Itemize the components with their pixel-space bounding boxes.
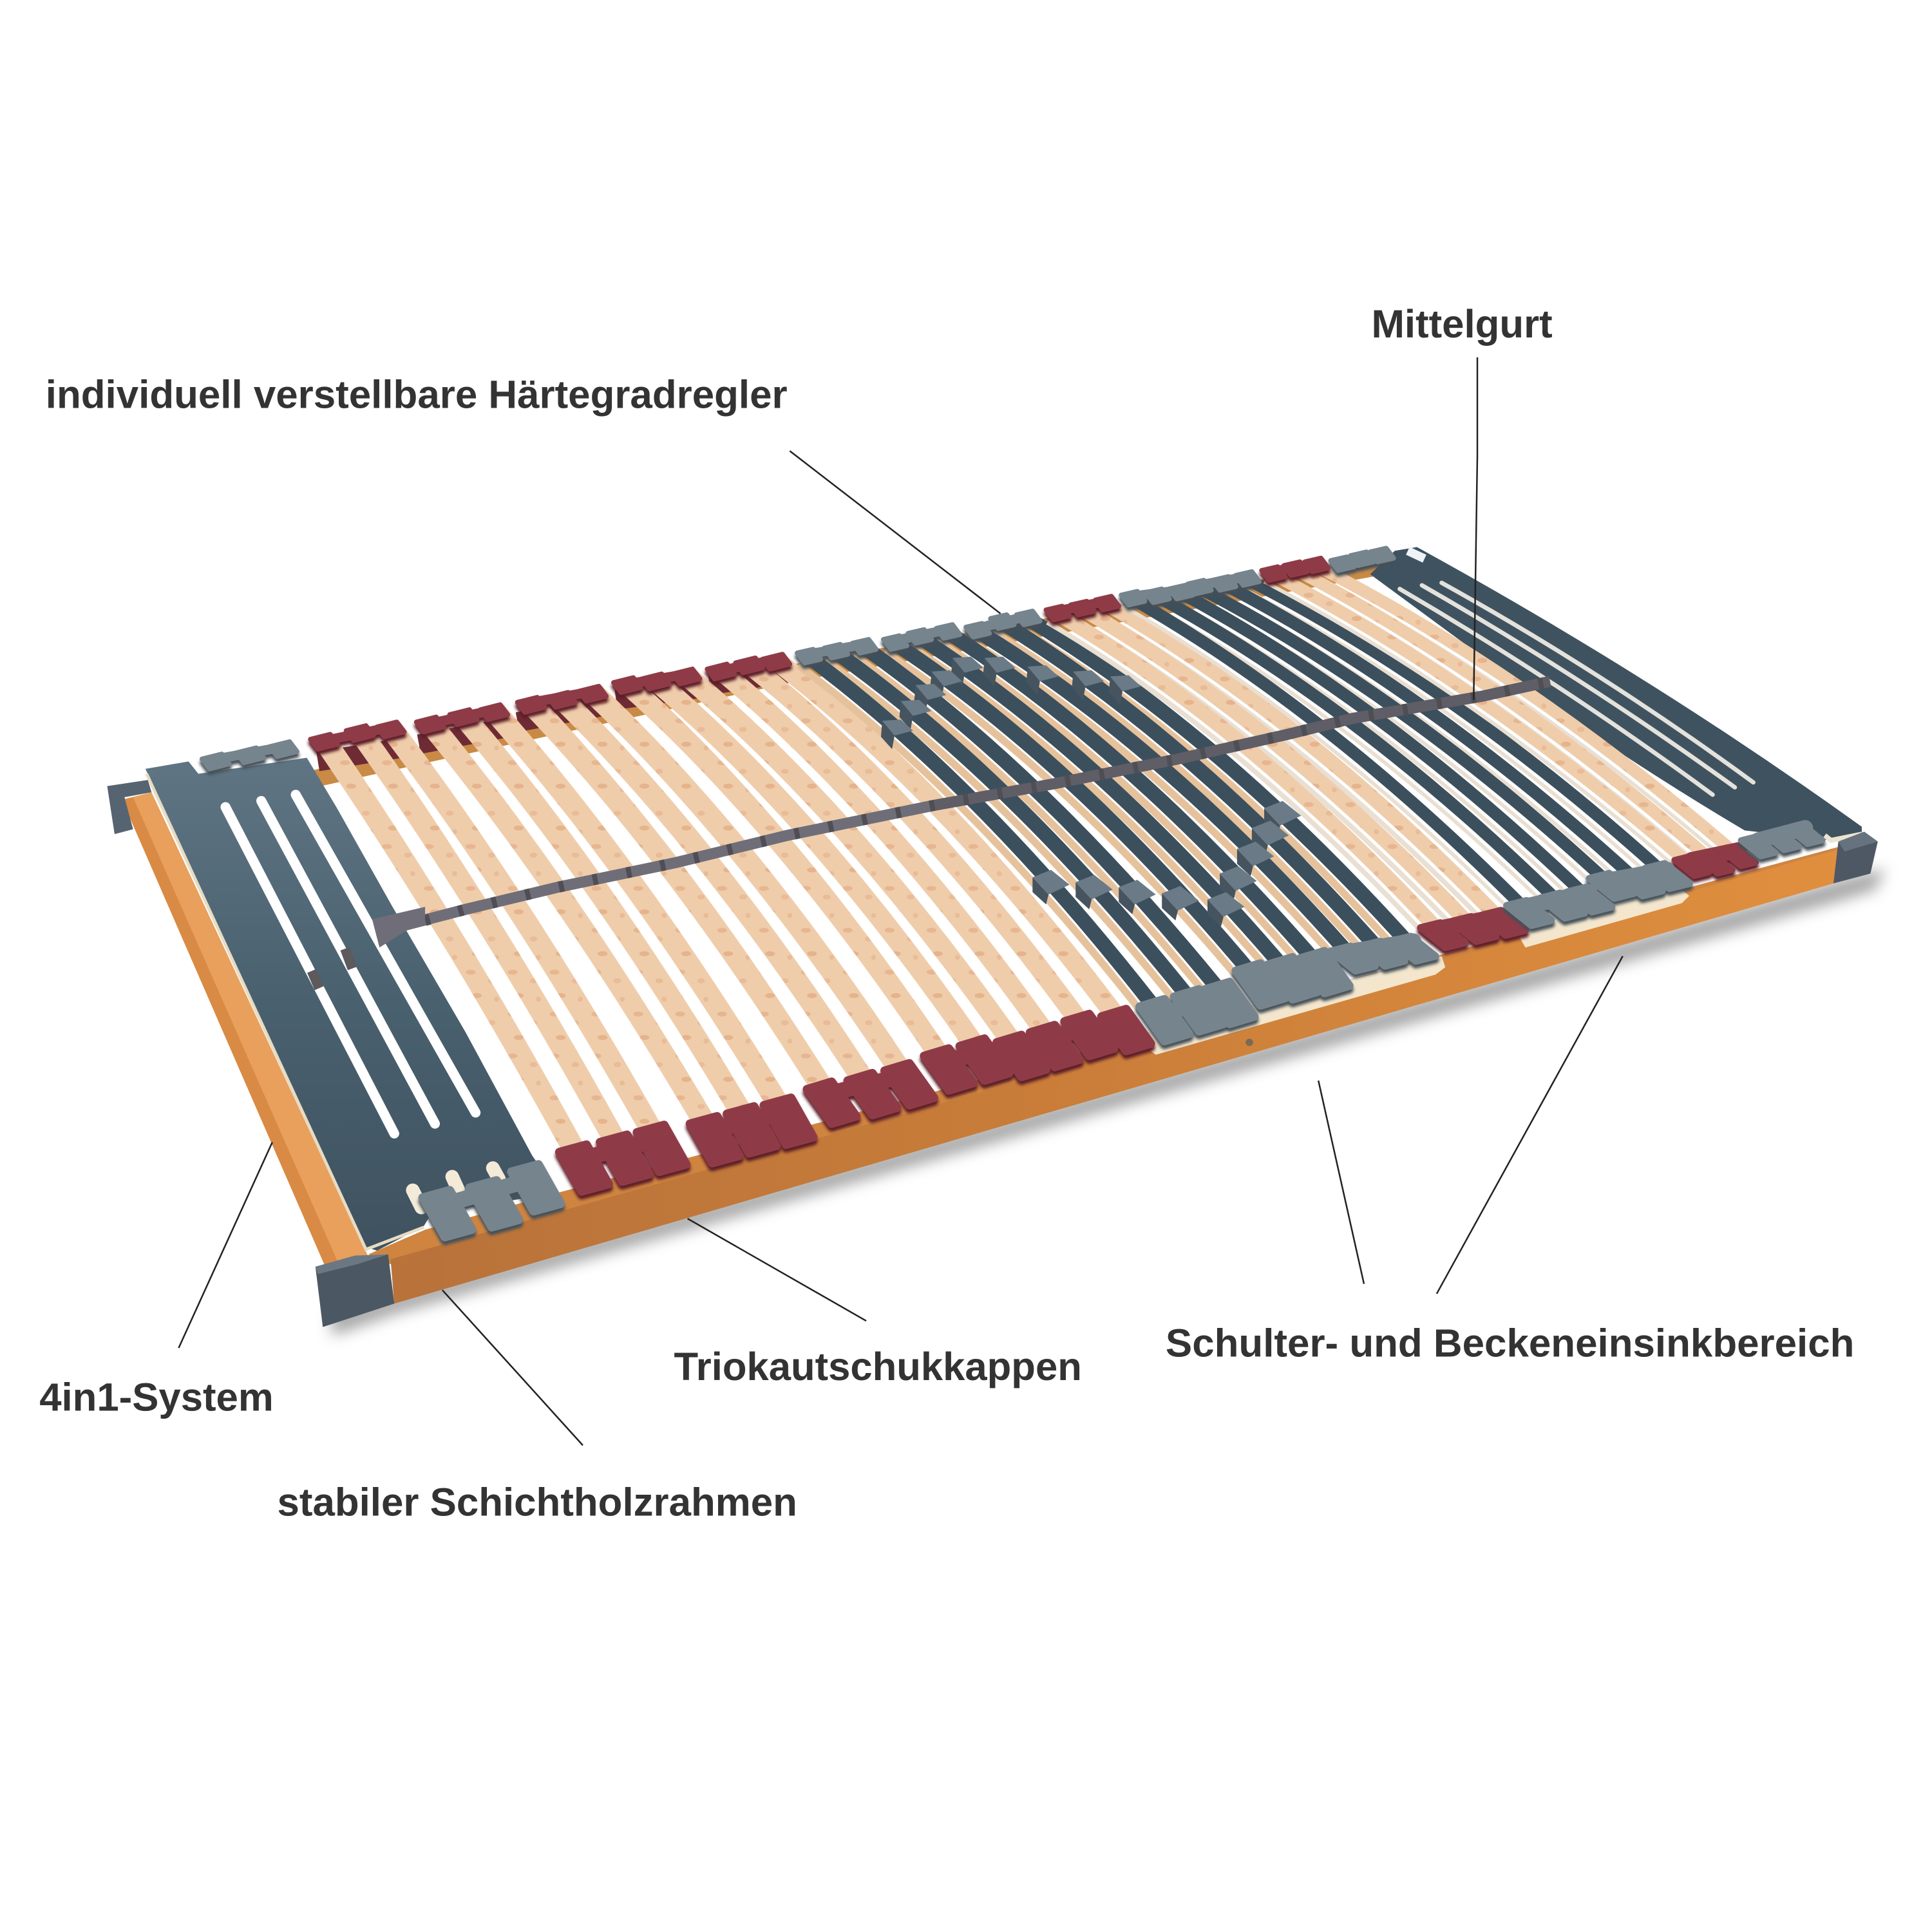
- back caps grey: [202, 548, 1394, 769]
- label: Triokautschukkappen: Triokautschukkappen: [674, 1345, 1082, 1388]
- back rubber holders: [318, 673, 788, 761]
- leader line: Triokautschukkappen: [688, 1218, 866, 1321]
- left board edge: [147, 774, 424, 1249]
- strap pieces in slots: [312, 949, 352, 988]
- centre strap: [372, 681, 1550, 947]
- left board front notches: [413, 1168, 499, 1208]
- 4in1 board right: [1370, 547, 1862, 840]
- label: stabiler Schichtholzrahmen: stabiler Schichtholzrahmen: [277, 1480, 797, 1524]
- rail hole: [1245, 1039, 1253, 1046]
- 4in1 board left: [146, 758, 558, 1251]
- front right corner cap: [1833, 831, 1878, 884]
- back caps red: [310, 558, 1329, 749]
- right board label: [1406, 547, 1426, 563]
- rail top face: [368, 845, 1844, 1264]
- leader line: Schultereinsink: [1318, 1081, 1364, 1284]
- front frame rail: [391, 848, 1844, 1303]
- label: Mittelgurt: Mittelgurt: [1371, 302, 1553, 346]
- label: Schulter- und Beckeneinsinkbereich: Schulter- und Beckeneinsinkbereich: [1166, 1321, 1854, 1365]
- frame shadow: [330, 869, 1885, 1336]
- dark adjustable slats centre: [799, 618, 1414, 1029]
- front caps grey: [422, 824, 1823, 1237]
- pale reinforcement plate left: [1146, 956, 1445, 1055]
- leader line: Beckeneinsink: [1437, 956, 1623, 1294]
- leader line: Schichtholzrahmen: [442, 1290, 583, 1445]
- pale reinforcement plate right: [1517, 887, 1689, 947]
- adjuster side faces: [881, 658, 1280, 927]
- front left corner cap: [316, 1255, 394, 1327]
- dark slats right: [1124, 579, 1667, 920]
- label: Härtegradregler: individuell verstellbare Härtegradregler: [46, 372, 788, 416]
- right board end edge: [1825, 834, 1862, 840]
- wood slats far right: [1264, 565, 1739, 874]
- right board slots: [1399, 583, 1754, 795]
- label: 4in1-System: 4in1-System: [39, 1376, 274, 1419]
- leader line: Mittelgurt: [1473, 357, 1477, 700]
- wood slats group near centre right: [1047, 604, 1503, 944]
- left board slots: [225, 795, 476, 1133]
- slatted frame product illustration: [107, 547, 1885, 1336]
- adjusters: [881, 657, 1301, 927]
- red end wood slats left: [325, 661, 1126, 1168]
- leader line: Härtegradregler: [790, 451, 1001, 614]
- adjuster top faces: [882, 657, 1301, 916]
- strap stitching: [425, 681, 1550, 920]
- left frame rail: [122, 792, 368, 1267]
- leader line: 4in1-System: [178, 1142, 272, 1348]
- front caps red: [560, 846, 1756, 1191]
- back left corner cap: [107, 780, 151, 834]
- strap end: [372, 907, 425, 947]
- back rail: [314, 564, 1392, 779]
